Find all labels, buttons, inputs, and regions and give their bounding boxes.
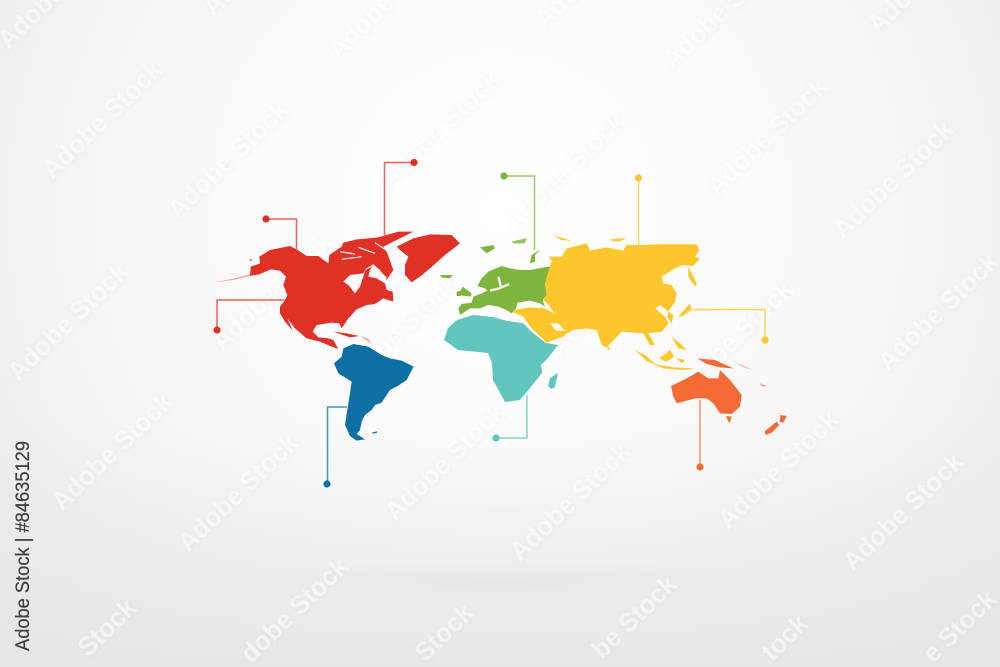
Africa landmass	[444, 315, 558, 402]
Adobe Stock watermarks: Adobe Stock	[838, 447, 970, 576]
Adobe Stock watermarks: Adobe Stock	[545, 232, 677, 361]
leader line and dot: west	[213, 300, 284, 334]
Adobe Stock watermarks: Adobe Stock	[333, 268, 465, 397]
Europe landmass	[440, 238, 552, 315]
Asia	[512, 174, 769, 370]
Adobe Stock watermarks: Adobe Stock	[505, 437, 637, 566]
South America	[323, 344, 414, 488]
Adobe Stock watermarks: Adobe Stock	[380, 397, 512, 526]
leader line and dot: north left	[262, 215, 296, 249]
Adobe Stock watermarks: Adobe Stock	[828, 115, 960, 244]
Asia landmass	[512, 235, 700, 370]
South America landmass	[334, 344, 414, 441]
leader line and dot: south america	[323, 407, 347, 488]
Adobe Stock watermarks: Adobe Stock	[668, 275, 800, 404]
world map with continents and leader lines	[213, 159, 787, 488]
Africa	[444, 315, 558, 442]
Oceania	[671, 358, 787, 471]
Europe	[440, 172, 552, 315]
Adobe Stock watermarks: be Stock	[587, 570, 683, 664]
Adobe Stock watermarks: tock	[757, 609, 814, 666]
Madagascar	[548, 373, 558, 389]
Adobe Stock watermarks: Adobe Stock	[207, 227, 339, 356]
Adobe Stock watermarks: Adobe Stock	[163, 95, 295, 224]
North America landmass	[213, 232, 460, 349]
leader line and dot: asia right	[692, 310, 769, 344]
Adobe Stock watermarks: Adobe Stock	[47, 387, 179, 516]
Adobe Stock watermarks: Adobe Stock	[713, 405, 845, 534]
leader line and dot: asia top	[635, 174, 642, 246]
leader line and dot: north top	[384, 159, 418, 236]
leader line and dot: oceania	[696, 400, 704, 471]
stock id label: Adobe Stock | #84635129	[12, 441, 34, 651]
Adobe Stock watermarks: Stock	[410, 598, 480, 667]
leader line and dot: africa	[492, 395, 527, 442]
Adobe Stock watermarks: Adobe Stock	[500, 107, 632, 236]
Australia, New Zealand and islands	[671, 358, 787, 435]
Adobe Stock watermarks: Stock	[73, 593, 143, 662]
Adobe Stock watermarks: Adobe Stock	[375, 65, 507, 194]
Adobe Stock watermarks: Adobe Stock	[173, 428, 305, 557]
Adobe Stock watermarks: Adobe Stock	[702, 72, 834, 201]
Adobe Stock watermarks: Adobe Stock	[3, 257, 135, 386]
leader line and dot: europe	[500, 172, 534, 250]
Adobe Stock watermarks: dobe Stock	[236, 552, 355, 667]
Adobe Stock watermarks: Adobe Stock	[37, 55, 169, 184]
North America	[213, 159, 460, 349]
